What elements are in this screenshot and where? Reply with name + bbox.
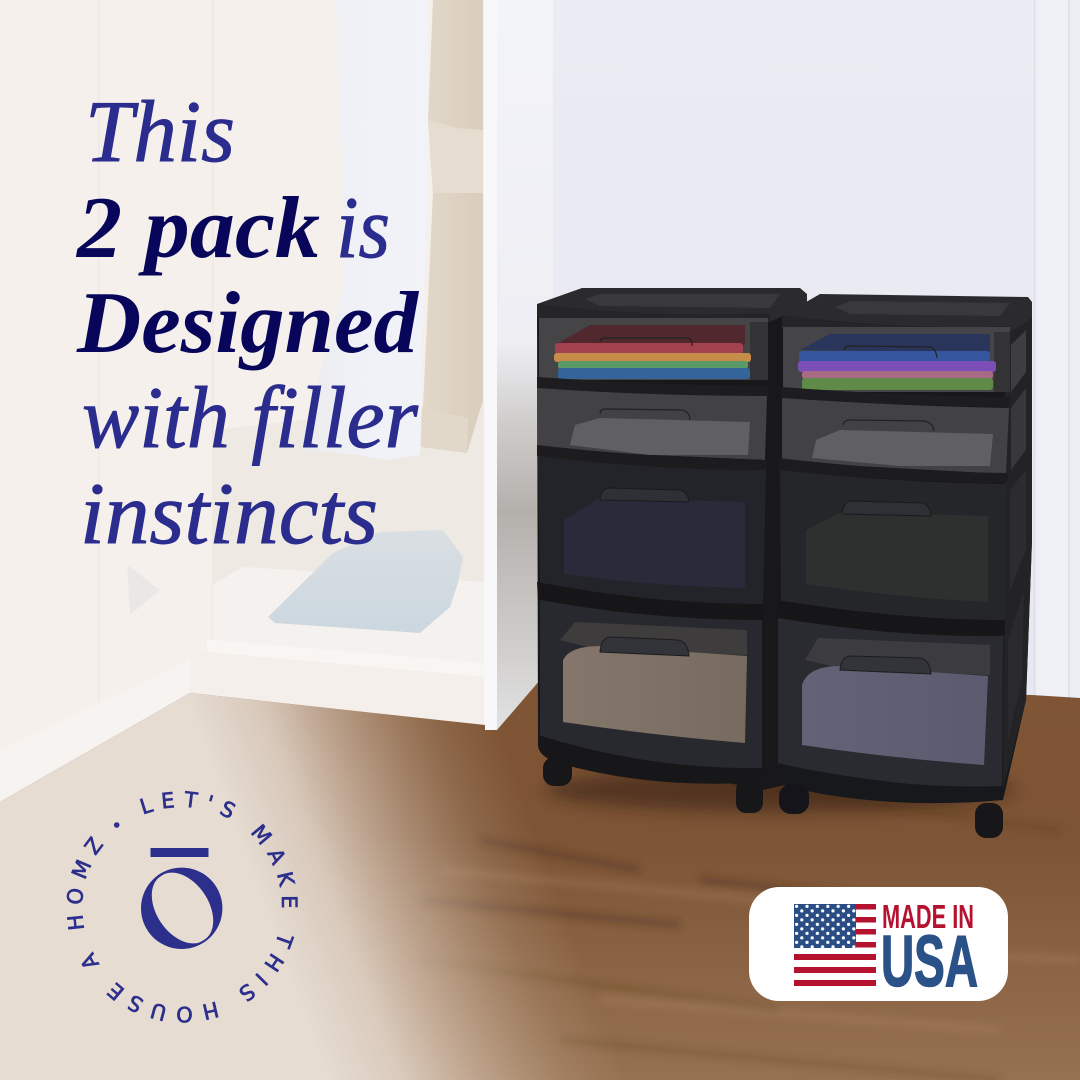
left band 4	[537, 582, 763, 620]
headline line: 2 pack: 2 pack	[75, 180, 320, 277]
right unit lid	[782, 294, 1032, 333]
right drawer 1	[783, 327, 1010, 392]
badge background	[749, 887, 1008, 1001]
logo bar	[150, 848, 208, 857]
right wheels	[779, 784, 1003, 838]
US flag	[794, 904, 876, 986]
shadow below drawers	[545, 768, 1015, 812]
headline line: with filler: with filler	[82, 370, 419, 467]
seal dot	[114, 822, 119, 828]
right drawer 4	[778, 618, 1003, 790]
headline	[75, 84, 420, 563]
circular slogan: LET'S MAKE THIS HOUSE A HOMZ	[66, 790, 298, 1023]
left wheels	[543, 757, 763, 813]
left band 2	[537, 377, 768, 396]
brand seal	[66, 790, 298, 1023]
wood floor	[0, 680, 1080, 1080]
left drawer 4	[540, 600, 762, 772]
made in USA badge	[749, 887, 1008, 1002]
column front edge	[484, 0, 497, 730]
left drawer 2	[538, 388, 767, 460]
USA text: USA	[881, 922, 978, 1002]
left band 3	[537, 445, 767, 470]
headline line: This: This	[85, 84, 235, 181]
logo ring	[141, 868, 222, 949]
folded jeans on shelf	[268, 530, 463, 633]
right drawer 3	[780, 470, 1006, 622]
right unit side	[1003, 304, 1032, 790]
headline line: is: is	[336, 180, 390, 277]
headline line: Designed: Designed	[76, 275, 420, 372]
left unit lid	[537, 288, 807, 322]
closet column	[497, 0, 553, 730]
left unit body	[537, 296, 806, 790]
right band 4	[777, 600, 1005, 635]
right base	[773, 762, 1003, 803]
left drawer 1	[539, 318, 768, 380]
right drawer unit	[773, 294, 1032, 838]
right unit body	[777, 304, 1032, 800]
hanging shirt	[300, 0, 428, 460]
left base	[538, 735, 763, 784]
hanging beige coat	[421, 0, 483, 453]
left drawer unit	[537, 288, 807, 813]
headline line: instincts: instincts	[80, 466, 378, 563]
right band 2	[781, 387, 1010, 407]
right band 3	[778, 458, 1008, 483]
right drawer 2	[782, 398, 1009, 474]
made in text: MADE IN	[882, 898, 974, 935]
left drawer 3	[538, 456, 766, 606]
